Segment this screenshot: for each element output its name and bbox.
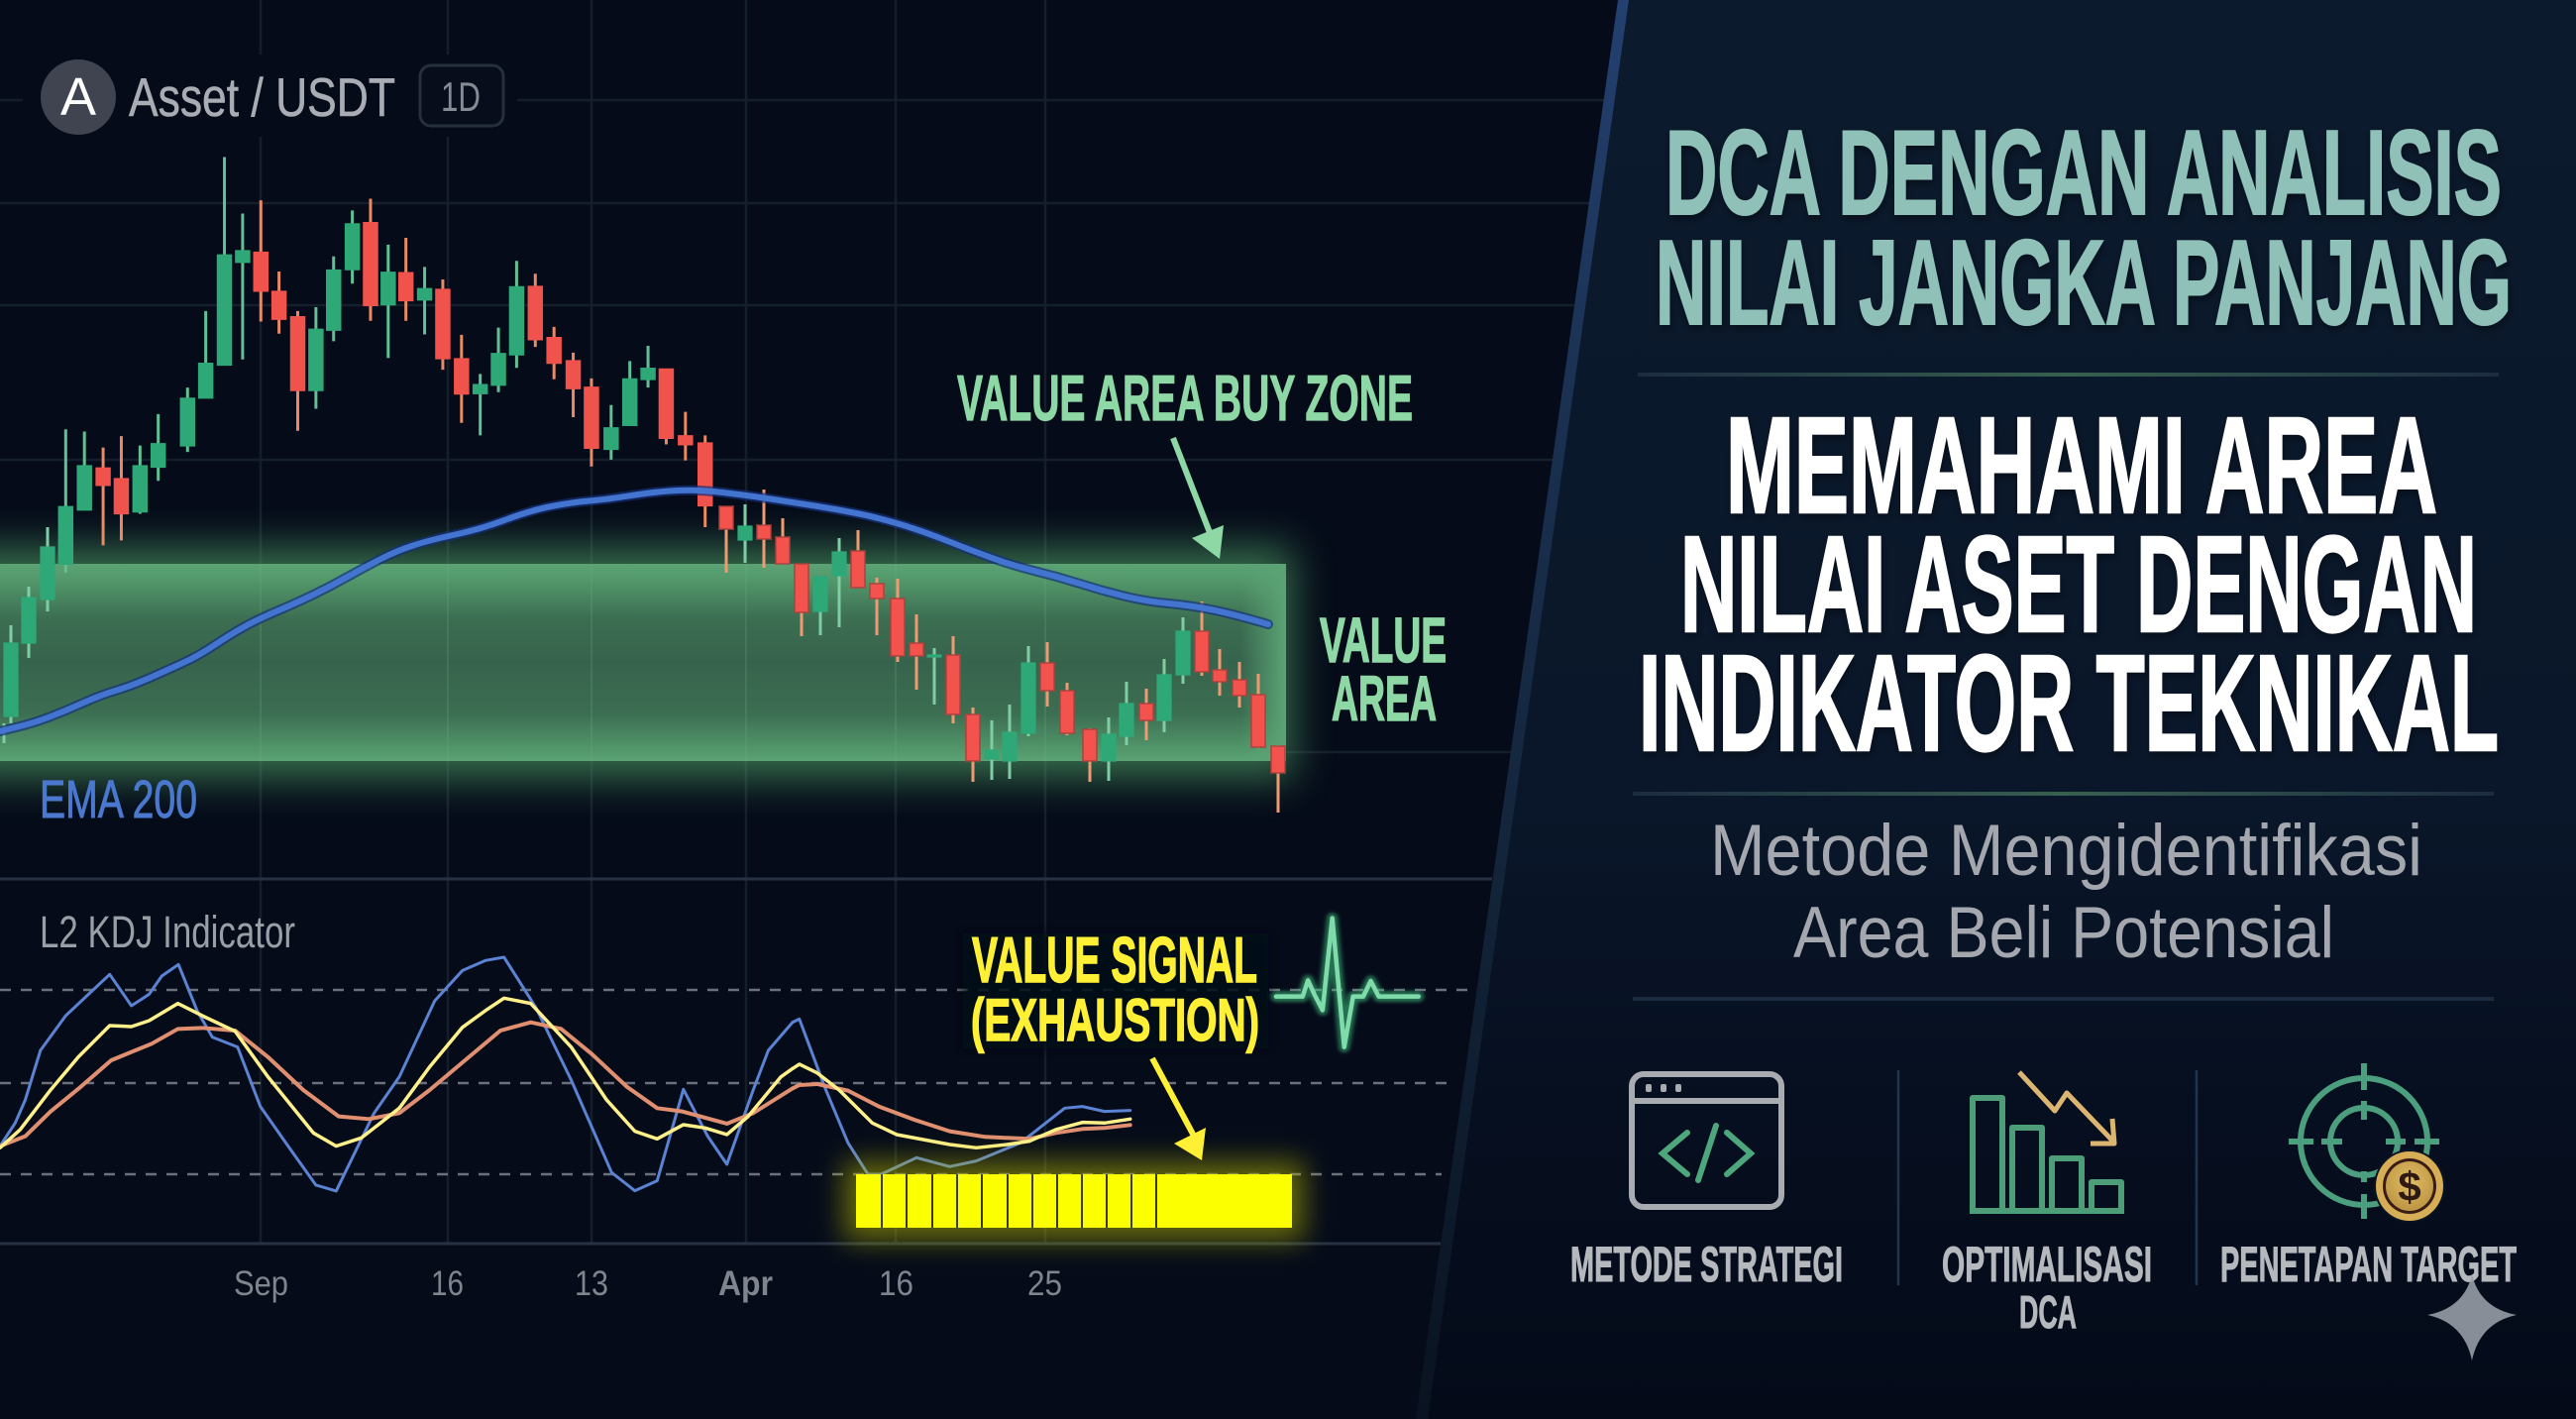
time axis labels: Sep: [234, 1264, 288, 1303]
icon: code window: [1632, 1074, 1781, 1207]
candlestick chart: [4, 157, 1285, 813]
icon: descending bars with arrow: [1970, 1072, 2124, 1211]
chart grid lines: [0, 0, 1625, 1244]
label: value area: VALUE: [1320, 604, 1447, 676]
label: value area: [1320, 604, 1447, 734]
KDJ chart lines: [0, 957, 1130, 1191]
time axis labels: 13: [575, 1264, 608, 1303]
time axis labels: 25: [1027, 1264, 1062, 1303]
time axis labels: [234, 1264, 1062, 1303]
label: optimalisasi DCA: OPTIMALISASI: [1942, 1237, 2152, 1292]
indicator panel separators: [0, 879, 1492, 1244]
callout: value area buy zone: VALUE AREA BUY ZONE: [957, 362, 1413, 434]
callout: value signal: VALUE SIGNAL: [972, 924, 1257, 996]
callout: value signal: (EXHAUSTION): [971, 987, 1259, 1053]
subtitle: [1710, 811, 2422, 973]
time axis labels: 16: [431, 1264, 464, 1303]
icon: sparkle star: [2427, 1274, 2517, 1361]
icon: asset logo: A: [60, 67, 96, 127]
chart header: asset name and timeframe: [41, 59, 503, 135]
callout: value area buy zone: [957, 362, 1413, 559]
icon: target with coin: $: [2398, 1163, 2421, 1210]
icon: asset logo: [41, 59, 116, 135]
label: KDJ indicator: L2 KDJ Indicator: [40, 907, 295, 957]
label: metode strategi: METODE STRATEGI: [1570, 1237, 1843, 1292]
yellow value signal bar: [844, 1161, 1304, 1241]
label: value area: AREA: [1332, 663, 1437, 734]
timeframe badge: [420, 65, 503, 126]
asset pair: Asset / USDT: [129, 66, 395, 128]
heading: DCA long-term value analysis: [1656, 105, 2512, 350]
subtitle: Metode Mengidentifikasi: [1710, 811, 2422, 891]
label: EMA 200: EMA 200: [40, 770, 197, 829]
panel: right title panel: [1416, 0, 2576, 1419]
EMA 200 line: [0, 491, 1268, 731]
time axis labels: Apr: [718, 1264, 773, 1303]
label: optimalisasi DCA: [1942, 1237, 2152, 1338]
heading: main title: [1639, 389, 2499, 780]
arrow: buy zone: [1173, 438, 1224, 559]
callout: value signal: [963, 924, 1268, 1160]
label: optimalisasi DCA: DCA: [2019, 1286, 2077, 1338]
panel: value area band: [0, 547, 1293, 779]
icon: heartbeat pulse: [1276, 919, 1419, 1047]
arrow: value signal: [1152, 1058, 1206, 1160]
time axis labels: 16: [879, 1264, 913, 1303]
timeframe badge: 1D: [441, 73, 481, 120]
icon: target with coin: [2289, 1063, 2445, 1223]
subtitle: Area Beli Potensial: [1793, 893, 2334, 973]
indicator level dashed lines: [0, 990, 1476, 1174]
